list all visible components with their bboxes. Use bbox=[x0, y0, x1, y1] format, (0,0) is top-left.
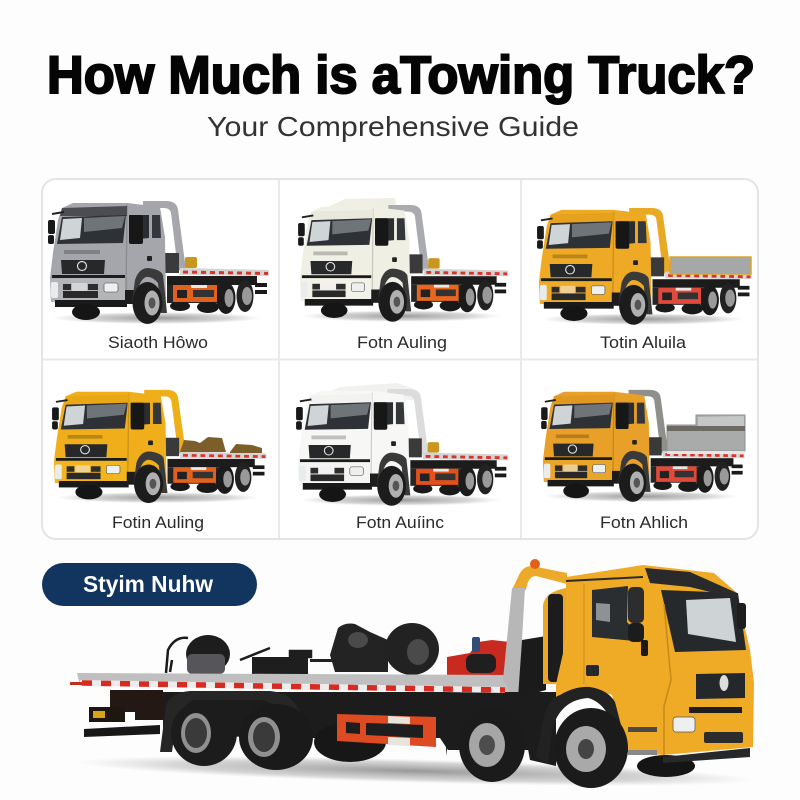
truck bed side rails bbox=[670, 257, 751, 274]
card 1: grey flatbed truck bbox=[48, 201, 269, 352]
boom arm bbox=[503, 559, 567, 692]
truck illustration: cream bbox=[298, 205, 508, 322]
flatbed deck with warning stripes bbox=[70, 673, 515, 692]
title: How Much is aTowing Truck? bbox=[47, 46, 755, 105]
card 5: white flatbed truck bbox=[296, 383, 508, 532]
truck illustration: amber bbox=[541, 390, 744, 502]
truck illustration: white bbox=[296, 389, 508, 506]
label: Siaoth Hôwo: Siaoth Hôwo bbox=[108, 334, 208, 352]
middle wheel bbox=[446, 688, 556, 782]
red side guard bbox=[337, 714, 436, 747]
label: Fotn Auling: Fotn Auling bbox=[357, 334, 447, 352]
cab body bbox=[556, 565, 754, 777]
roof fairing bbox=[317, 198, 397, 212]
roof fairing bbox=[317, 383, 414, 400]
cargo: tyres and machinery bbox=[166, 623, 510, 675]
label: Fotn Auíinc: Fotn Auíinc bbox=[356, 514, 444, 532]
pill label: Styim Nuhw bbox=[83, 571, 213, 597]
rear wheels bbox=[171, 700, 386, 770]
main truck illustration: yellow flatbed tow truck bbox=[70, 559, 755, 792]
cargo on deck bbox=[180, 437, 262, 453]
label: Fotin Auling: Fotin Auling bbox=[112, 514, 204, 532]
cab rear and winch bbox=[518, 588, 566, 698]
card 6: amber truck with caged bed bbox=[541, 390, 745, 532]
card 3: yellow truck with side-rail bed bbox=[537, 208, 751, 352]
caged truck bed bbox=[667, 415, 745, 454]
panel: truck comparison grid bbox=[42, 179, 758, 539]
label: Fotn Ahlich: Fotn Ahlich bbox=[600, 514, 688, 532]
ground shadow bbox=[75, 750, 755, 792]
truck illustration: grey bbox=[48, 201, 269, 324]
label: Totin Aluila: Totin Aluila bbox=[600, 334, 687, 352]
subtitle: Your Comprehensive Guide bbox=[207, 111, 579, 142]
card 2: white flatbed truck bbox=[298, 198, 508, 352]
name pill badge bbox=[42, 563, 257, 606]
chassis bbox=[84, 690, 556, 752]
truck illustration: yellow with boom bbox=[52, 390, 266, 503]
card 4: yellow flatbed with cargo bbox=[52, 390, 266, 532]
truck illustration: yellow bbox=[537, 208, 751, 325]
front wheel and arch bbox=[536, 687, 628, 788]
